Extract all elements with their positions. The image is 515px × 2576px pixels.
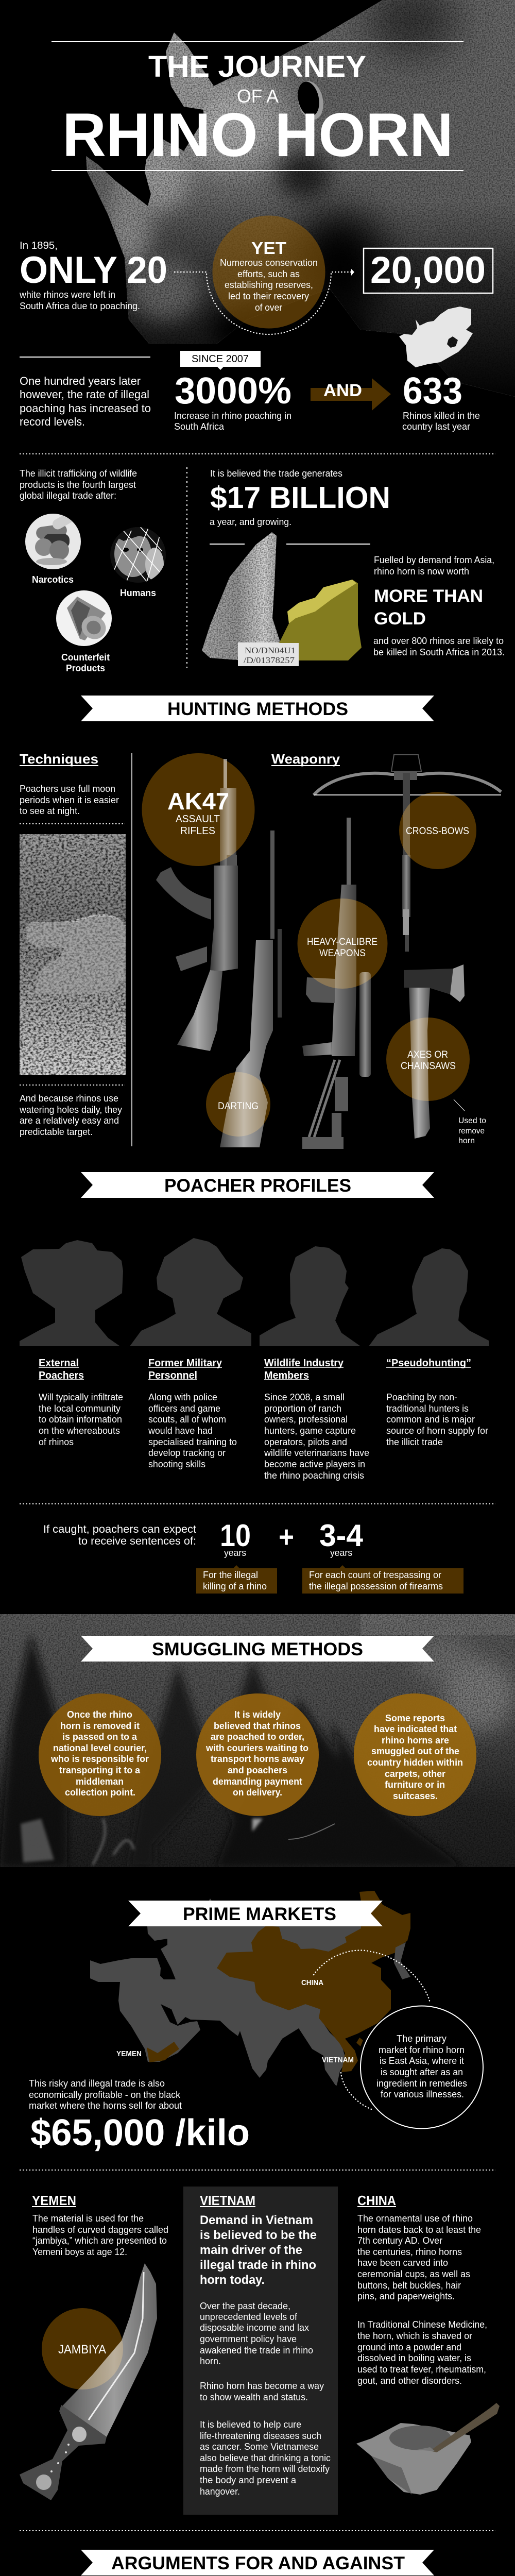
map: yemen region — [147, 2042, 179, 2062]
map labels: YEMEN — [116, 2049, 142, 2058]
profile: former military personnel: shooting skills — [148, 1459, 205, 1469]
callout: since 2007 3000%: South Africa — [174, 421, 225, 432]
callout: since 2007 3000% — [174, 351, 291, 432]
profile: wildlife industry members: hunters, game capture — [264, 1426, 356, 1436]
callout circle: national courier: Once the rhino — [67, 1709, 132, 1720]
text: watering holes — [19, 1093, 122, 1137]
profile: wildlife industry members: owners, professional — [264, 1414, 348, 1425]
callout circle: axes or chainsaws — [386, 1018, 470, 1101]
profile: pseudohunting: the illicit trade — [386, 1437, 443, 1447]
text: ornamental use: ceremonial cups, as well as — [357, 2269, 470, 2279]
callout circle: national courier: horn is removed it — [60, 1721, 140, 1731]
profile: pseudohunting: source of horn supply for — [386, 1426, 488, 1436]
profile: wildlife industry members: Since 2008, a small — [264, 1392, 345, 1402]
text: illicit trafficking: The illicit trafficking of wildlife — [20, 468, 137, 479]
callout circle: hidden in carpets: country hidden within — [367, 1757, 463, 1768]
icon: south africa map — [399, 307, 473, 367]
text: yemen: Yemeni boys at age 12. — [32, 2247, 127, 2257]
callout circle: primary market east asia: ingredient in remedies — [376, 2078, 467, 2089]
stat: 3-4 years — [302, 1518, 464, 1594]
text: over the past decade — [200, 2301, 313, 2366]
profile: external poachers — [39, 1358, 123, 1447]
heading: arguments for and against: ARGUMENTS FOR AND AGAINST — [111, 2553, 405, 2573]
stat: 3-4 years: 3-4 — [319, 1518, 364, 1553]
text: watering holes: And because rhinos use — [20, 1093, 118, 1104]
text: demand in vietnam — [200, 2213, 317, 2287]
text: one hundred years later — [20, 357, 151, 428]
panel: china — [356, 2193, 500, 2495]
panel: yemen — [20, 2193, 168, 2500]
text: more than gold — [373, 555, 505, 657]
plus sign: + — [279, 1520, 294, 1554]
heading: prime markets: PRIME MARKETS — [183, 1904, 336, 1924]
text: more than gold: Fuelled by demand from Asia, — [374, 555, 494, 565]
text: black market price: $65,000 /kilo — [30, 2112, 250, 2154]
text: yemen: handles of curved daggers called — [32, 2225, 168, 2235]
text: watering holes: watering holes daily, they — [19, 1105, 122, 1115]
text: wealth and status: Rhino horn has become a way — [200, 2381, 324, 2391]
text: wealth and status: to show wealth and status. — [200, 2392, 308, 2402]
callout circle: hidden in carpets: Some reports — [385, 1713, 445, 1723]
title: OF A — [237, 86, 279, 107]
stat: 3-4 years: For each count of trespassing or — [309, 1570, 441, 1580]
callout: in 1895 only 20: South Africa due to poaching. — [20, 301, 140, 311]
text: yemen — [32, 2213, 168, 2257]
profile: former military personnel — [148, 1358, 237, 1469]
callout circle: ak47 assault rifles: ASSAULT — [176, 814, 220, 825]
arrow: dotted path from 20 to 20,000 — [175, 269, 354, 334]
heading: poacher profiles: POACHER PROFILES — [164, 1176, 351, 1196]
callout box: 20,000: 20,000 — [370, 249, 486, 291]
callout circle: yet numerous conservation efforts — [212, 215, 325, 329]
panel: techniques — [19, 751, 126, 1137]
profile: wildlife industry members — [264, 1358, 369, 1481]
text: illicit trafficking: products is the fourth largest — [20, 480, 136, 490]
text: if caught: to receive sentences of: — [78, 1535, 196, 1547]
text: cure diseases: hangover. — [200, 2486, 240, 2497]
heading: china: CHINA — [357, 2193, 396, 2208]
callout: since 2007 3000%: SINCE 2007 — [192, 353, 249, 365]
text: ornamental use: buttons, belt buckles, hair — [357, 2280, 461, 2291]
text: wealth and status — [200, 2381, 324, 2402]
text: over the past decade: disposable income and lax — [200, 2323, 309, 2333]
profile: external poachers: to obtain information — [39, 1414, 122, 1425]
title — [52, 42, 464, 171]
profile: wildlife industry members: become active players in — [264, 1459, 365, 1469]
stat: 3-4 years: the illegal possession of firearms — [309, 1581, 443, 1591]
icon: counterfeit products money roll: Products — [66, 663, 105, 673]
icon: ak47 rifle — [156, 759, 238, 1051]
callout circle: national courier: national level courier, — [53, 1743, 147, 1753]
profile: former military personnel: scouts, all of whom — [148, 1414, 226, 1425]
note: used to remove horn: Used to — [458, 1116, 486, 1125]
callout circle: darting — [206, 1072, 270, 1137]
text: more than gold: be killed in South Africa in 2013. — [373, 647, 505, 657]
text: more than gold: rhino horn is now worth — [374, 566, 469, 577]
map labels — [116, 1978, 354, 2064]
heading: weaponry: Weaponry — [271, 751, 340, 767]
profile: former military personnel: officers and game — [148, 1403, 220, 1414]
callout circle: primary market east asia: The primary — [397, 2033, 447, 2044]
text: cure diseases — [200, 2419, 331, 2497]
profile: wildlife industry members: operators, pilots and — [264, 1437, 347, 1447]
callout circle: poached to order — [196, 1693, 319, 1816]
callout circle: national courier: is passed on to a — [62, 1732, 138, 1742]
text: ornamental use: 7th century AD. Over — [357, 2235, 442, 2246]
text: traditional chinese medicine — [357, 2319, 487, 2386]
text: traditional chinese medicine: dissolved in boiling water, is — [357, 2353, 471, 2363]
text: cure diseases: made from the horn will detoxify — [200, 2464, 330, 2474]
text: traditional chinese medicine: ground into a powder and — [357, 2342, 461, 2352]
text: one hundred years later: poaching has increased to — [20, 402, 151, 415]
profile: pseudohunting: Poaching by non- — [386, 1392, 457, 1402]
panel: weaponry — [142, 751, 501, 1149]
profile: external poachers: on the whereabouts — [39, 1426, 120, 1436]
text: ornamental use: The ornamental use of rhino — [357, 2213, 473, 2224]
arrow: and: AND — [323, 381, 362, 400]
text: over the past decade: awakened the trade in rhino — [200, 2345, 313, 2355]
callout circle: hidden in carpets: rhino horns are — [382, 1735, 449, 1745]
heading: smuggling methods — [81, 1636, 434, 1662]
profile: wildlife industry members: wildlife veterinarians have — [264, 1448, 369, 1458]
text: over the past decade: Over the past decade, — [200, 2301, 290, 2311]
callout circle: primary market east asia: for various illnesses. — [381, 2089, 464, 2099]
text: cure diseases: It is believed to help cure — [200, 2419, 301, 2430]
text: ornamental use: have been carved into — [357, 2258, 448, 2268]
icon: humans portrait: Humans — [120, 588, 156, 598]
icon: silhouette pseudohunting — [369, 1248, 489, 1346]
text: full moon — [20, 784, 119, 816]
callout circle: ak47 assault rifles: RIFLES — [180, 825, 215, 837]
stat: 3-4 years: years — [330, 1548, 352, 1558]
callout circle: yet numerous conservation efforts: establishing reserves, — [225, 280, 313, 290]
map labels: VIETNAM — [322, 2056, 354, 2064]
profile: former military personnel: Personnel — [148, 1370, 197, 1381]
text: demand in vietnam: horn today. — [200, 2273, 265, 2287]
heading: vietnam: VIETNAM — [200, 2193, 255, 2208]
text: demand in vietnam: illegal trade in rhino — [200, 2258, 316, 2272]
icon: rhino horn with label: NO/DN04U1 — [245, 646, 296, 655]
callout circle: primary market east asia — [360, 2006, 483, 2129]
text: cure diseases: also believe that drinking a tonic — [200, 2453, 331, 2463]
callout circle: poached to order: transport horns away — [211, 1754, 304, 1764]
callout circle: hidden in carpets: suitcases. — [393, 1791, 438, 1801]
callout circle: poached to order: believed that rhinos — [214, 1721, 301, 1731]
icon: sniper rifle — [302, 818, 371, 1149]
title: RHINO HORN — [62, 100, 453, 170]
text: illicit trafficking — [20, 468, 137, 501]
heading: hunting methods: HUNTING METHODS — [167, 699, 348, 719]
callout circle: jambiya — [42, 2308, 123, 2389]
icon: axe — [404, 964, 465, 1139]
text: black market price: market where the horns sell for about — [29, 2100, 182, 2111]
icon: silhouette wildlife industry — [260, 1246, 360, 1346]
callout: in 1895 only 20: In 1895, — [20, 240, 58, 251]
map: asia and middle east — [90, 1891, 430, 2110]
profile: wildlife industry members: Members — [264, 1370, 309, 1381]
text: cure diseases: as cancer. Some Vietnamese — [200, 2442, 319, 2452]
callout: 633 rhinos killed: Rhinos killed in the — [403, 411, 480, 421]
callout circle: yet numerous conservation efforts: of over — [255, 302, 282, 313]
text: traditional chinese medicine: In Traditional Chinese Medicine, — [357, 2319, 487, 2330]
text: if caught — [43, 1523, 196, 1547]
heading: poacher profiles — [81, 1172, 434, 1198]
photo: dead rhino — [20, 834, 126, 1075]
text: traditional chinese medicine: gout, and other disorders. — [357, 2376, 462, 2386]
text: cure diseases: life-threatening diseases such — [200, 2431, 321, 2441]
callout circle: axes or chainsaws: AXES OR — [407, 1049, 448, 1060]
text: demand in vietnam: main driver of the — [200, 2243, 302, 2257]
icon: narcotics pills — [25, 510, 81, 585]
profile: external poachers: Poachers — [39, 1370, 84, 1381]
profile: external poachers: of rhinos — [39, 1437, 74, 1447]
text: watering holes: are a relatively easy and — [20, 1115, 119, 1126]
profile: wildlife industry members: the rhino poaching crisis — [264, 1470, 364, 1481]
heading: arguments for and against — [81, 2550, 434, 2575]
icon: crossbow — [314, 755, 501, 952]
title: THE JOURNEY — [148, 50, 366, 83]
callout circle: cross-bows — [399, 792, 476, 869]
callout circle: hidden in carpets: have indicated that — [374, 1724, 457, 1734]
text: over the past decade: unprecedented levels of — [200, 2312, 298, 2322]
callout circle: national courier: middleman — [76, 1776, 124, 1787]
profile: former military personnel: would have had — [148, 1426, 213, 1436]
callout circle: yet numerous conservation efforts: Numerous conservation — [220, 258, 318, 268]
icon: gold nugget — [279, 580, 362, 660]
callout circle: hidden in carpets: smuggled out of the — [371, 1746, 459, 1756]
callout circle: national courier — [39, 1693, 161, 1816]
callout: since 2007 3000%: Increase in rhino poaching in — [174, 411, 291, 421]
callout: 17 billion: It is believed the trade generates — [210, 468, 342, 479]
icon: counterfeit products money roll: Counterfeit — [61, 652, 110, 663]
profile: wildlife industry members: proportion of ranch — [264, 1403, 341, 1414]
stat: 10 years — [196, 1518, 277, 1594]
callout circle: hidden in carpets: carpets, other — [385, 1769, 445, 1779]
callout circle: hidden in carpets: furniture or in — [385, 1780, 445, 1790]
icon: narcotics pills: Narcotics — [32, 574, 74, 585]
callout circle: poached to order: with couriers waiting to — [205, 1743, 308, 1753]
heading: techniques: Techniques — [20, 751, 98, 767]
icon: jambiya dagger — [20, 2263, 157, 2500]
callout circle: yet numerous conservation efforts: efforts, such as — [237, 269, 300, 279]
text: demand in vietnam: Demand in Vietnam — [200, 2213, 313, 2227]
text: black market price: This risky and illegal trade is also — [29, 2078, 165, 2089]
callout circle: hidden in carpets — [354, 1693, 476, 1816]
text: more than gold: and over 800 rhinos are likely to — [373, 636, 504, 646]
callout circle: poached to order: demanding payment — [213, 1776, 302, 1787]
text: if caught: If caught, poachers can expect — [43, 1523, 196, 1535]
heading: hunting methods — [81, 696, 434, 721]
callout circle: national courier: who is responsible for — [50, 1754, 149, 1764]
text: more than gold: GOLD — [374, 609, 426, 629]
profile: former military personnel: Along with police — [148, 1392, 217, 1402]
icon: silhouette external poacher — [20, 1240, 123, 1346]
callout: 633 rhinos killed: 633 — [403, 370, 462, 412]
profile: pseudohunting — [386, 1358, 488, 1447]
profile: pseudohunting: “Pseudohunting” — [386, 1358, 471, 1369]
text: black market price: economically profitable - on the black — [29, 2090, 181, 2100]
text: ornamental use: the centuries, rhino horns — [357, 2247, 462, 2257]
callout circle: poached to order: It is widely — [234, 1709, 281, 1720]
icon: humans portrait — [110, 526, 166, 598]
callout circle: yet numerous conservation efforts: YET — [251, 239, 286, 258]
map: china region — [217, 1891, 410, 2072]
callout circle: axes or chainsaws: CHAINSAWS — [401, 1061, 456, 1072]
profile: former military personnel: Former Military — [148, 1358, 222, 1369]
callout circle: primary market east asia: is sought after as an — [381, 2067, 463, 2077]
panel: smuggling background photo — [0, 1614, 515, 1867]
callout circle: national courier: collection point. — [65, 1787, 135, 1798]
callout circle: ak47 assault rifles — [142, 753, 254, 866]
callout circle: darting: DARTING — [218, 1101, 259, 1112]
text: black market price — [29, 2078, 250, 2154]
callout: 17 billion: $17 BILLION — [210, 481, 390, 515]
callout circle: cross-bows: CROSS-BOWS — [406, 826, 469, 837]
profile: pseudohunting: traditional hunters is — [386, 1403, 469, 1414]
icon: rhino horn with label: /D/01378257 — [244, 655, 295, 665]
text: full moon: periods when it is easier — [20, 795, 119, 805]
arrow: and — [311, 378, 391, 411]
profile: external poachers: the local community — [39, 1403, 121, 1414]
text: full moon: Poachers use full moon — [20, 784, 115, 794]
callout: 633 rhinos killed: country last year — [402, 421, 470, 432]
callout circle: heavy calibre weapons: HEAVY-CALIBRE — [307, 937, 377, 947]
text: ornamental use: horn dates back to at least the — [357, 2225, 481, 2235]
stat: 10 years: For the illegal — [203, 1570, 258, 1580]
text: over the past decade: horn. — [200, 2356, 221, 2366]
hero rhino head photo — [86, 0, 515, 397]
map arcs — [314, 1950, 430, 2110]
heading: yemen: YEMEN — [32, 2193, 76, 2208]
text: cure diseases: the body and prevent a — [200, 2475, 297, 2485]
profile: pseudohunting: common and is major — [386, 1414, 475, 1425]
callout: in 1895 only 20: white rhinos were left in — [19, 290, 115, 300]
text: full moon: to see at night. — [20, 806, 80, 816]
callout circle: heavy calibre weapons — [298, 899, 387, 989]
callout circle: jambiya: JAMBIYA — [58, 2343, 106, 2357]
profile: external poachers: Will typically infiltrate — [39, 1392, 123, 1402]
stat: 10 years: killing of a rhino — [203, 1581, 267, 1591]
text: traditional chinese medicine: used to treat fever, rheumatism, — [357, 2364, 486, 2375]
profile: former military personnel: develop tracking or — [148, 1448, 226, 1458]
callout: 17 billion — [210, 468, 390, 544]
text: over the past decade: government policy have — [200, 2334, 297, 2344]
text: watering holes: predictable target. — [20, 1127, 93, 1137]
callout circle: poached to order: are poached to order, — [211, 1732, 304, 1742]
callout: since 2007 3000%: 3000% — [175, 370, 291, 412]
text: more than gold: MORE THAN — [374, 586, 483, 606]
icon: silhouette former military — [130, 1238, 251, 1346]
icon: mortar and pestle — [356, 2403, 500, 2495]
callout: in 1895 only 20 — [19, 240, 167, 311]
text: one hundred years later: One hundred years later — [20, 375, 141, 387]
callout circle: poached to order: and poachers — [228, 1765, 287, 1775]
text: yemen: “jambiya,” which are presented to — [32, 2235, 167, 2246]
callout circle: national courier: transporting it to a — [59, 1765, 141, 1775]
text: illicit trafficking: global illegal trade after: — [20, 490, 116, 501]
panel: vietnam — [183, 2187, 338, 2515]
callout circle: poached to order: on delivery. — [233, 1787, 282, 1798]
note: used to remove horn: remove — [458, 1127, 485, 1136]
heading: smuggling methods: SMUGGLING METHODS — [152, 1639, 363, 1659]
callout circle: primary market east asia: is East Asia, where it — [380, 2056, 464, 2066]
text: yemen: The material is used for the — [32, 2213, 144, 2224]
profile: former military personnel: specialised training to — [148, 1437, 237, 1447]
icon: rhino horn with label — [202, 532, 299, 666]
callout circle: primary market east asia: market for rhino horn — [379, 2045, 465, 2055]
icon: hunting rifle — [220, 831, 282, 1147]
profile: wildlife industry members: Wildlife Industry — [264, 1358, 344, 1369]
callout: 17 billion: a year, and growing. — [210, 517, 291, 527]
text: one hundred years later: however, the rate of illegal — [20, 388, 149, 401]
text: one hundred years later: record levels. — [20, 415, 85, 428]
stat: 10 years: 10 — [220, 1518, 251, 1553]
text: traditional chinese medicine: the horn, which is shaved or — [357, 2331, 472, 2341]
icon: counterfeit products money roll — [56, 590, 112, 673]
callout: 633 rhinos killed — [402, 370, 480, 432]
heading: prime markets — [128, 1901, 383, 1926]
callout: in 1895 only 20: ONLY 20 — [20, 249, 167, 291]
map labels: CHINA — [301, 1978, 323, 1987]
note: used to remove horn: horn — [458, 1137, 475, 1145]
profile: external poachers: External — [39, 1358, 79, 1369]
text: ornamental use: pins, and paperweights. — [357, 2291, 455, 2301]
callout circle: ak47 assault rifles: AK47 — [167, 788, 229, 815]
stat: 10 years: years — [224, 1548, 246, 1558]
note: used to remove horn — [454, 1099, 486, 1145]
text: ornamental use — [357, 2213, 481, 2301]
text: demand in vietnam: is believed to be the — [200, 2228, 317, 2242]
callout circle: yet numerous conservation efforts: led to their recovery — [228, 291, 309, 301]
callout circle: heavy calibre weapons: WEAPONS — [319, 948, 366, 959]
